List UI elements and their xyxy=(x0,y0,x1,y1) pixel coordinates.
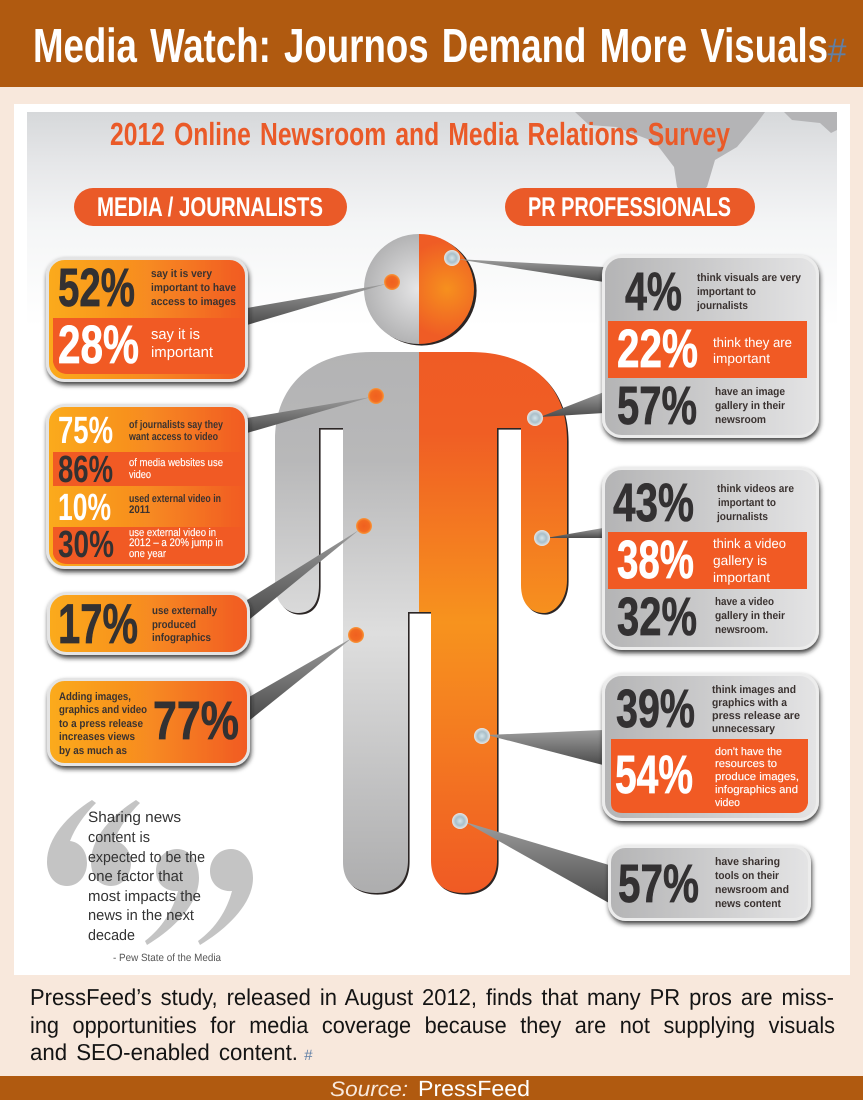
callout: images media: access to images xyxy=(151,296,236,308)
callout: video PR: journalists xyxy=(716,511,768,523)
callout: press release PR: produce images, xyxy=(715,771,799,783)
pill: media / journalists: MEDIA / JOURNALISTS xyxy=(97,192,323,222)
callout: images PR: think visuals are very xyxy=(697,272,802,284)
callout: sharing tools xyxy=(610,846,810,920)
quote text: decade xyxy=(88,927,135,944)
callout: press release views: to a press release xyxy=(59,718,143,730)
callout: video PR: 43% xyxy=(613,473,694,533)
callout: sharing tools: news content xyxy=(715,898,781,910)
callout: images PR: important to xyxy=(697,286,756,298)
quote text: most impacts the xyxy=(88,888,201,905)
callout: images PR: 22% xyxy=(617,319,698,379)
callout: images PR: have an image xyxy=(715,386,785,398)
map silhouette xyxy=(575,112,837,200)
header hash mark: # xyxy=(827,32,847,70)
callout: video PR: important to xyxy=(718,497,776,509)
summary text: ing opportunities for media coverage because they are not supplying visuals xyxy=(30,1012,835,1038)
callout: video PR: important xyxy=(713,570,770,585)
callout: images media: important xyxy=(151,344,214,361)
callout: video PR: think a video xyxy=(713,536,786,551)
callout: images media: say it is very xyxy=(151,268,213,280)
callout: infographics: use externally xyxy=(152,605,218,617)
callout: press release views: increases views xyxy=(59,731,135,743)
callout: video media: video xyxy=(129,469,151,481)
summary text: and SEO-enabled content. xyxy=(30,1039,298,1065)
header banner xyxy=(0,0,863,87)
callout: press release PR: graphics with a xyxy=(712,697,788,709)
callout: images media: 28% xyxy=(58,315,139,375)
callout: video PR: gallery is xyxy=(713,553,767,568)
quote text: one factor that xyxy=(88,868,184,885)
callout: press release PR: don't have the xyxy=(715,746,782,758)
callout: video media: want access to video xyxy=(128,431,218,443)
callout: video PR: think videos are xyxy=(717,483,794,495)
callout: video media: of media websites use xyxy=(129,457,223,469)
body right half xyxy=(419,352,567,893)
callout: video media: 30% xyxy=(58,524,114,566)
quote text: Sharing news xyxy=(88,809,181,826)
callout: sharing tools: 57% xyxy=(618,854,699,914)
callout: video media: 10% xyxy=(58,487,111,529)
pill: PR professionals: PR PROFESSIONALS xyxy=(528,192,731,222)
callout: sharing tools: have sharing xyxy=(715,856,780,868)
marker dots xyxy=(348,250,550,829)
callout: images PR: gallery in their xyxy=(715,400,786,412)
quote marks xyxy=(47,800,253,945)
source footer xyxy=(0,1076,863,1100)
callout: infographics: 17% xyxy=(58,592,138,655)
callout: images PR: think they are xyxy=(713,335,792,350)
callout: press release PR: resources to xyxy=(715,758,777,770)
callout: sharing tools: newsroom and xyxy=(715,884,789,896)
callout: video media: 86% xyxy=(58,449,113,491)
callout: press release PR: 54% xyxy=(615,745,693,805)
callout: press release views: by as much as xyxy=(59,745,127,757)
callout: press release PR: unnecessary xyxy=(712,723,776,735)
figure shadow outline xyxy=(277,236,569,895)
callout: video media: use external video in xyxy=(129,527,216,539)
callout: images PR xyxy=(604,256,818,436)
callout: press release PR: 39% xyxy=(616,679,695,739)
callout: images PR: newsroom xyxy=(715,414,766,426)
human figure xyxy=(275,234,569,895)
callout: infographics: produced xyxy=(152,619,196,631)
callout: press release views: 77% xyxy=(153,691,239,751)
callout: images PR: 57% xyxy=(617,376,697,436)
callout: images media: 52% xyxy=(58,258,135,318)
quote text: content is xyxy=(88,829,150,846)
callout: press release PR: think images and xyxy=(712,684,796,696)
callout: images media: say it is xyxy=(151,326,200,343)
callout: press release PR: press release are xyxy=(712,710,800,722)
callout: press release views: graphics and video xyxy=(59,704,147,716)
callout: infographics: infographics xyxy=(152,632,211,644)
connector wedges xyxy=(247,259,609,903)
quote text xyxy=(88,809,221,964)
quote text: expected to be the xyxy=(88,849,205,866)
head left half xyxy=(364,234,419,344)
callout: infographics xyxy=(48,592,248,655)
callout: images PR: 4% xyxy=(625,262,682,322)
callout: video PR: 38% xyxy=(617,530,694,590)
summary text: PressFeed’s study, released in August 2012, finds that many PR pros are miss- xyxy=(30,984,834,1010)
callout: video PR: have a video xyxy=(715,596,774,608)
callout: images PR: journalists xyxy=(696,300,748,312)
callout: press release views xyxy=(48,680,248,764)
callout: images media xyxy=(48,258,246,380)
quote text: - Pew State of the Media xyxy=(113,952,221,964)
callout: video PR: newsroom. xyxy=(715,624,768,636)
callout: press release PR xyxy=(604,674,818,820)
callout: press release PR: infographics and xyxy=(715,784,798,796)
callout: video PR: gallery in their xyxy=(715,610,786,622)
summary text: # xyxy=(304,1047,313,1064)
callout: video media: of journalists say they xyxy=(129,419,224,431)
callout: video media: 75% xyxy=(58,410,113,452)
quote text: news in the next xyxy=(88,907,195,924)
callout: video PR xyxy=(604,468,818,648)
callout: press release PR: video xyxy=(715,797,740,809)
body left half xyxy=(275,352,420,893)
callout: video media xyxy=(48,406,246,568)
main white panel xyxy=(14,104,850,975)
callout: video media: used external video in xyxy=(129,493,221,505)
callout: images media: important to have xyxy=(151,282,236,294)
callout: video media: one year xyxy=(129,548,166,560)
callout: video media: 2011 xyxy=(129,504,150,516)
pill: media / journalists xyxy=(74,188,347,226)
callout: video PR: 32% xyxy=(617,587,697,647)
callout: images PR: important xyxy=(713,351,770,366)
callout: sharing tools: tools on their xyxy=(715,870,780,882)
summary text xyxy=(30,984,835,1065)
callout: press release views: Adding images, xyxy=(59,691,131,703)
callout: video media: 2012 – a 20% jump in xyxy=(129,537,223,549)
head right half xyxy=(419,234,474,344)
pill: PR professionals xyxy=(505,188,755,226)
